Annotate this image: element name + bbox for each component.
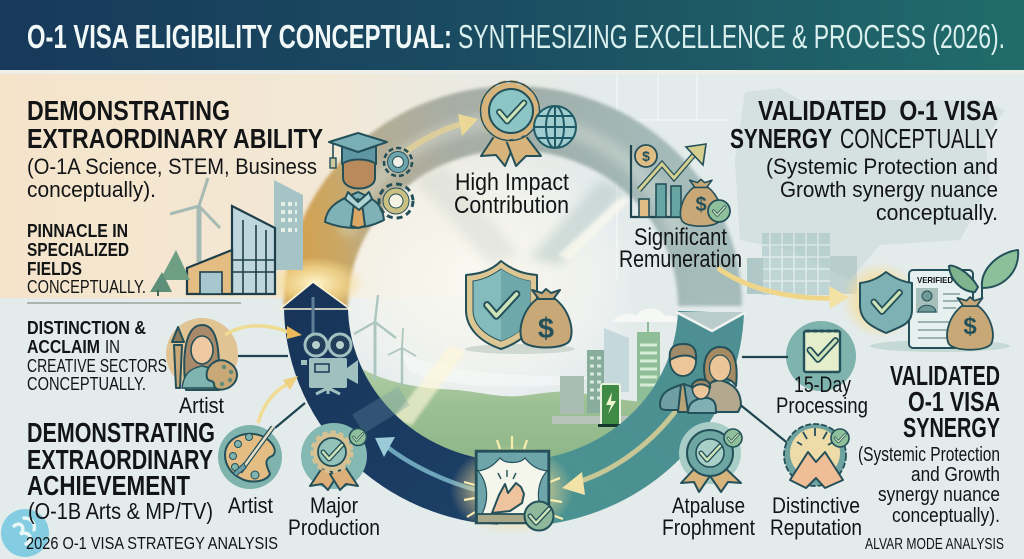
arrow: on teal arc	[562, 408, 678, 495]
label: artist upper: Artist	[179, 393, 225, 418]
text: O-1A description: (O-1A Science, STEM, Business	[27, 154, 317, 179]
label: distinctive reputation: Reputation	[770, 515, 862, 540]
process ring	[265, 114, 746, 495]
arrow: on upper arc	[405, 114, 478, 152]
text: systemic protection bottom: and Growth	[911, 464, 1000, 486]
icon: palette	[218, 425, 282, 489]
icon: brush	[172, 327, 184, 388]
money bag: $	[963, 313, 977, 340]
heading: extraordinary ability	[27, 95, 323, 154]
heading: extraordinary ability: EXTRAORDINARY ABILITY	[27, 123, 323, 154]
label: 15-day processing: Processing	[776, 393, 868, 418]
icon: high impact medal	[480, 82, 541, 166]
heading: extraordinary achievement: ACHIEVEMENT	[27, 470, 190, 501]
heading: extraordinary achievement: EXTRAORDINARY	[27, 444, 213, 475]
text: systemic protection top: (Systemic Protection and	[766, 154, 998, 179]
arc: lower left navy	[316, 306, 500, 493]
label: atpaluse frophment: Frophment	[662, 515, 756, 540]
heading: extraordinary ability: DEMONSTRATING	[27, 95, 230, 126]
icon: wind turbine left	[170, 178, 220, 262]
arrow: palette to camera	[258, 376, 298, 423]
icon: globe	[534, 106, 576, 148]
label: high impact contribution	[454, 169, 569, 219]
center wind turbines	[354, 295, 416, 385]
text: pinnacle in specialized fields: PINNACLE IN	[27, 220, 128, 241]
arc: lower right teal	[530, 312, 711, 493]
heading: validated synergy top: SYNERGY	[730, 123, 832, 154]
arc: upper gold to grey	[316, 118, 710, 306]
icon: growth chart	[631, 144, 730, 226]
title: O-1 VISA ELIGIBILITY CONCEPTUAL:	[27, 18, 452, 55]
text: O-1A description	[27, 154, 317, 202]
text: pinnacle in specialized fields: SPECIALIZED	[27, 239, 129, 260]
leaves	[949, 250, 1018, 298]
money bag	[947, 297, 993, 350]
label: high impact contribution: High Impact	[455, 169, 569, 196]
icon: tree	[160, 250, 190, 280]
center hill	[362, 369, 642, 458]
glow: arrowhead	[265, 257, 365, 309]
document: VERIFIED	[917, 275, 953, 285]
text: systemic protection bottom: conceptually).	[892, 505, 1000, 527]
text: pinnacle in specialized fields: FIELDS	[27, 258, 82, 279]
heading: extraordinary achievement: DEMONSTRATING	[27, 417, 215, 448]
center cloud	[612, 308, 682, 322]
document	[909, 270, 973, 348]
icon: curtain with applause	[450, 436, 574, 536]
text: distinction and acclaim: ACCLAIM	[27, 336, 100, 357]
footer left: 2026 O-1 VISA STRATEGY ANALYSIS	[26, 533, 278, 553]
heading: validated synergy top	[730, 95, 998, 154]
text: systemic protection top: conceptually.	[876, 200, 998, 225]
arrowhead: navy	[280, 282, 350, 309]
label: 15-day processing: 15-Day	[794, 372, 852, 397]
icon: distinctive reputation	[784, 424, 849, 488]
icon: modern buildings	[150, 180, 303, 296]
arrow: on navy arc	[375, 437, 480, 491]
icon: gears	[379, 148, 413, 218]
badge	[708, 200, 730, 222]
icon: coin: $	[642, 148, 650, 164]
skyline top right	[747, 233, 857, 295]
icon: 15-day calendar	[786, 321, 856, 391]
arrow: to verified icon	[718, 268, 849, 309]
heading: extraordinary achievement	[27, 417, 215, 501]
map silhouette	[735, 88, 1005, 280]
label: 15-day processing	[776, 372, 868, 418]
text: systemic protection bottom	[858, 444, 1000, 527]
arc inner highlight	[345, 120, 680, 240]
icon: watermark	[1, 509, 49, 557]
label: high impact contribution: Contribution	[454, 192, 569, 219]
rays inside upper arc	[414, 165, 520, 265]
icon: film camera	[301, 334, 358, 394]
heading: validated synergy bottom	[890, 360, 1000, 443]
icon: verified document group	[842, 250, 1018, 352]
text: O-1A description: conceptually).	[27, 177, 156, 202]
divider left	[27, 302, 241, 304]
connector lines	[238, 356, 790, 445]
icon: EV charger	[598, 384, 623, 427]
icon: money bag: $	[695, 194, 707, 216]
text: pinnacle in specialized fields: CONCEPTUALLY.	[27, 276, 146, 297]
light ray center left	[392, 345, 465, 425]
light band	[358, 396, 404, 424]
text: systemic protection bottom: synergy nuance	[878, 484, 1000, 506]
text: systemic protection top: Growth synergy nuance	[780, 177, 998, 202]
label: significant remuneration: Remuneration	[619, 246, 742, 273]
label: distinctive reputation: Distinctive	[772, 493, 860, 518]
label: artist lower: Artist	[228, 493, 274, 518]
center glow	[310, 150, 640, 410]
icon: graduate with gears	[325, 133, 413, 228]
text: systemic protection top	[766, 154, 998, 225]
shield	[860, 272, 912, 333]
header	[0, 0, 1024, 74]
text: pinnacle in specialized fields	[27, 220, 146, 297]
label: atpaluse frophment: Atpaluse	[672, 493, 745, 518]
icon: artist portrait	[166, 318, 238, 390]
label: distinctive reputation	[770, 493, 862, 540]
label: major production: Production	[288, 515, 380, 540]
label: major production	[288, 493, 380, 540]
icon: center shield and money bag: $	[538, 313, 554, 345]
icon: family	[660, 344, 741, 413]
icon: atpaluse medal	[679, 422, 742, 492]
center city	[552, 322, 660, 427]
label: major production: Major	[310, 493, 358, 518]
text: distinction and acclaim: IN	[105, 336, 120, 357]
arrow: artist to camera	[225, 326, 302, 339]
text: O-1B: (O-1B Arts & MP/TV)	[28, 498, 213, 524]
text: distinction and acclaim	[27, 317, 167, 394]
text: distinction and acclaim: CREATIVE SECTORS	[27, 355, 167, 376]
label: significant remuneration: Significant	[634, 224, 727, 251]
arrow tip: grey	[676, 312, 746, 331]
icon: center shield and money bag	[465, 261, 575, 354]
label: significant remuneration	[619, 224, 742, 273]
text: distinction and acclaim: DISTINCTION &	[27, 317, 146, 338]
icon: major production medal	[301, 423, 367, 490]
text: distinction and acclaim: CONCEPTUALLY.	[27, 373, 146, 394]
icon: small palette	[207, 360, 237, 390]
label: atpaluse frophment	[662, 493, 756, 540]
